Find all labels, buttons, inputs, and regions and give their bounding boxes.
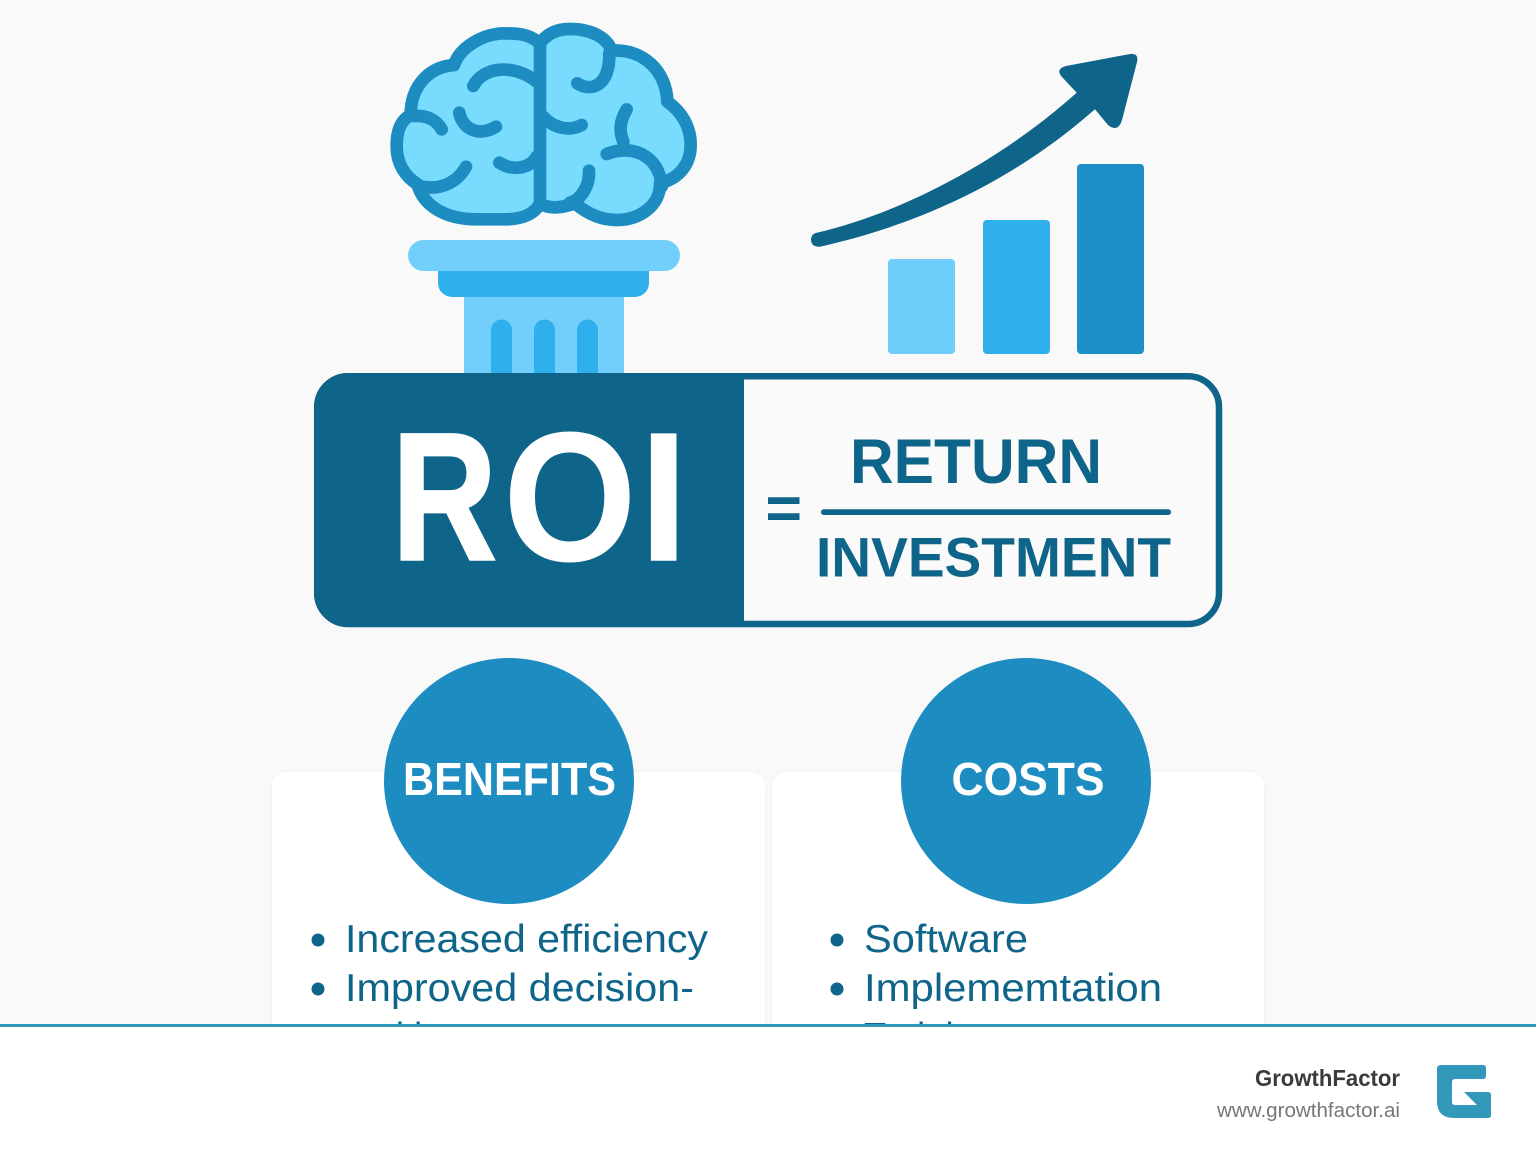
icon: pillar [408, 240, 680, 374]
heading: ROI [392, 393, 688, 600]
list: costs: Implememtation [864, 967, 1162, 1010]
icon: GrowthFactor logo [1437, 1065, 1491, 1118]
list: costs: Software [864, 918, 1028, 961]
heading: costs: COSTS [952, 753, 1104, 805]
badge: costs [901, 658, 1151, 904]
heading: ROI: R [392, 396, 497, 598]
footer [0, 1024, 1536, 1154]
footer rule [0, 1024, 1536, 1027]
brand url: www.growthfactor.ai [1216, 1100, 1400, 1122]
heading: ROI: O [503, 393, 637, 600]
list: benefits: making [345, 1016, 463, 1059]
list: costs: Training [864, 1016, 994, 1059]
banner frame [317, 376, 1219, 624]
list: benefits: Increased efficiency [345, 918, 709, 961]
denominator: INVESTMENT: INVESTMENT [816, 526, 1171, 589]
panel: ROI [314, 373, 744, 627]
bar chart with rising arrow [811, 54, 1144, 354]
card: benefits [272, 772, 765, 1072]
equals sign [768, 497, 800, 520]
panel: benefits [272, 658, 765, 1072]
list: benefits [312, 918, 709, 1059]
numerator: RETURN: RETURN [850, 427, 1102, 497]
bar: tall [1077, 164, 1144, 354]
list: benefits: Improved decision- [345, 967, 694, 1010]
icon: brain on pillar [397, 29, 691, 374]
ROI formula banner [314, 373, 1219, 627]
bar: small [888, 259, 955, 354]
bar: medium [983, 220, 1050, 354]
footer background [0, 1024, 1536, 1154]
icon: brain [397, 29, 691, 220]
panel: costs [772, 658, 1264, 1072]
arrow: growth [811, 54, 1137, 247]
badge: benefits [384, 658, 634, 904]
fraction line [821, 509, 1171, 515]
heading: ROI: I [639, 394, 688, 600]
heading: benefits: BENEFITS [403, 753, 616, 805]
card: costs [772, 772, 1264, 1072]
brand name: GrowthFactor [1255, 1065, 1400, 1091]
list: costs [830, 918, 1162, 1059]
